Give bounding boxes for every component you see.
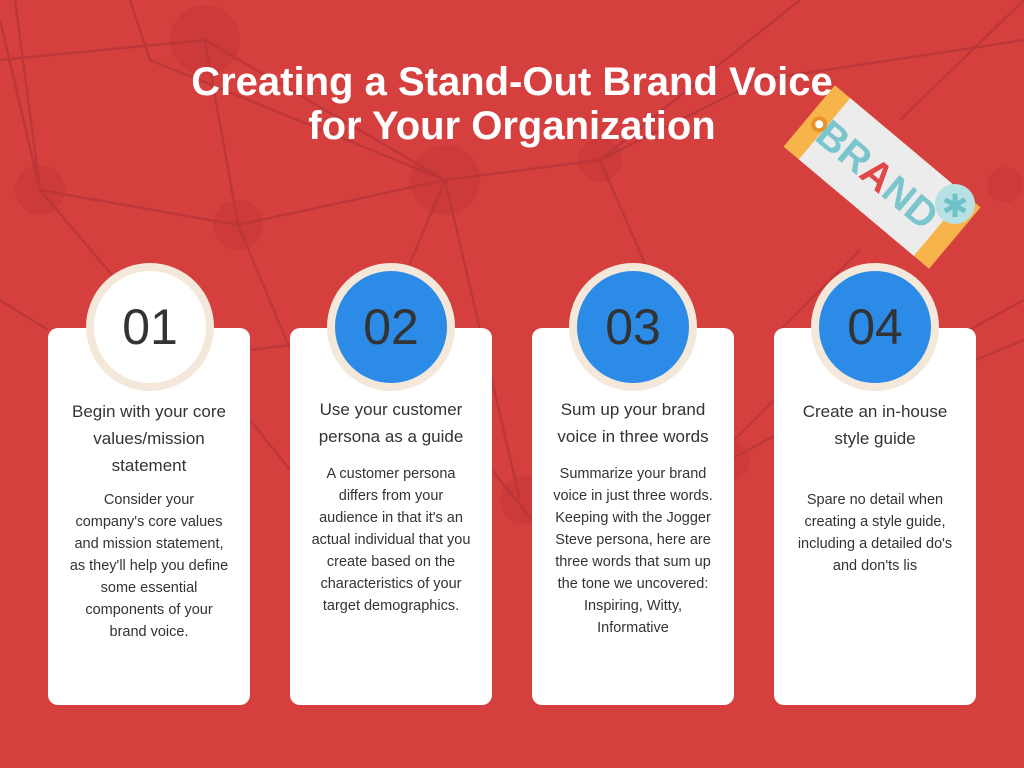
title xyxy=(191,60,833,148)
panel: step 1: Begin with your core values/mission statement xyxy=(72,402,226,475)
panel: step 2 xyxy=(290,328,492,705)
icon: brand tag xyxy=(784,85,980,269)
panel: step 1 xyxy=(48,328,250,705)
icon: number 02 xyxy=(327,263,455,391)
icon: number 04: 04 xyxy=(847,299,903,355)
panel: step 3 xyxy=(532,328,734,705)
panel: step 4: Create an in-house style guide xyxy=(803,402,947,448)
panel: step 3: Summarize your brand voice in just three words. xyxy=(553,466,713,504)
panel: step 2: Use your customer persona as a guide xyxy=(319,400,463,446)
panel: step 1: Consider your company's core values and mission statement, as they'll help you define some essential components of your brand voice. xyxy=(70,492,228,640)
panel: step 3: Sum up your brand voice in three words xyxy=(557,400,709,446)
icon: number 01: 01 xyxy=(122,299,178,355)
icon: number 03 xyxy=(569,263,697,391)
icon: brand tag: BRAND xyxy=(807,112,946,239)
title: for Your Organization xyxy=(308,104,716,148)
panel: step 3: Keeping with the Jogger Steve persona, here are three words that sum up the tone we uncovered: Inspiring, Witty, Informative xyxy=(555,510,711,636)
icon: brand tag: ✱ xyxy=(942,188,968,224)
panel: step 4 xyxy=(774,328,976,705)
icon: number 01 xyxy=(86,263,214,391)
icon: number 03: 03 xyxy=(605,299,661,355)
panel: step 2: A customer persona differs from your audience in that it's an actual individual that you create based on the characteristics of your target demographics. xyxy=(312,466,470,614)
panel: step 4: Spare no detail when creating a style guide, including a detailed do's and don'ts lis xyxy=(798,492,952,574)
icon: number 02: 02 xyxy=(363,299,419,355)
title: Creating a Stand-Out Brand Voice xyxy=(191,60,833,104)
icon: number 04 xyxy=(811,263,939,391)
